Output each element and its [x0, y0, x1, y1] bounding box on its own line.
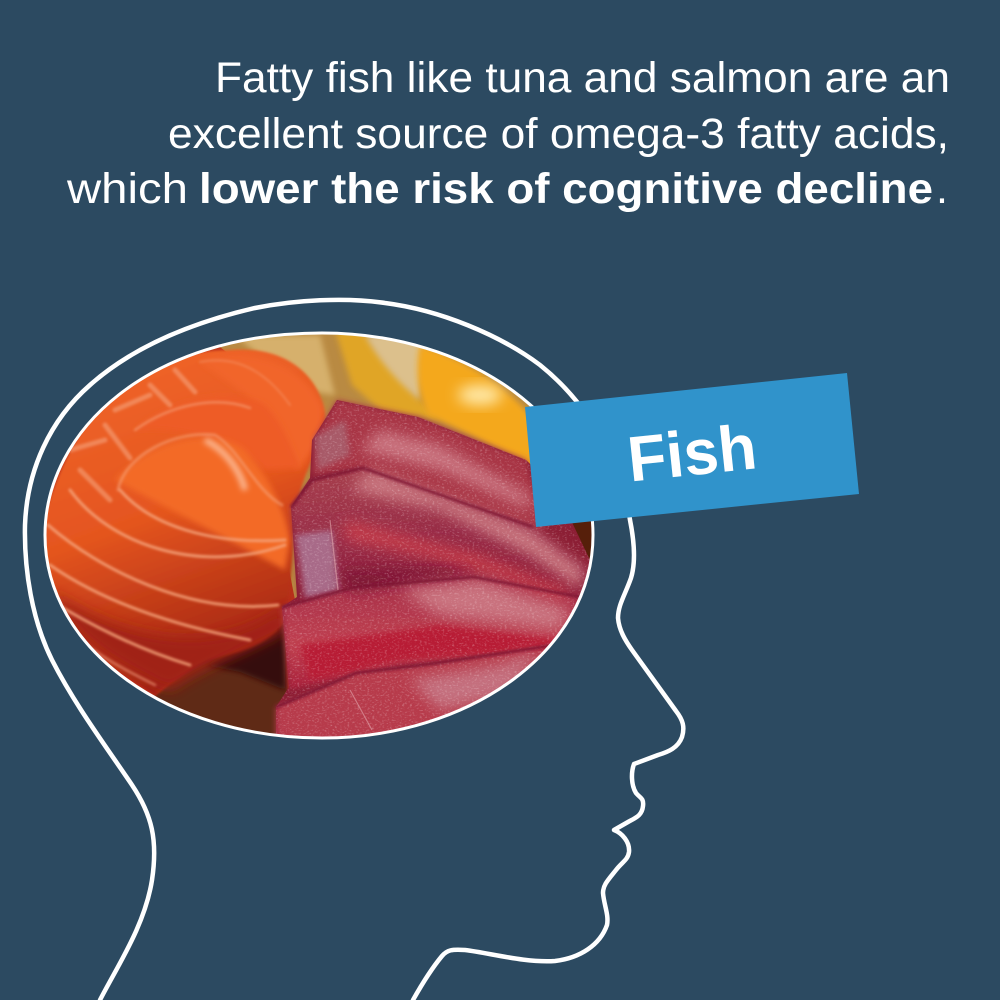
tuna surface speckle: [276, 400, 596, 740]
headline text: [66, 54, 950, 213]
salmon fat lines: [48, 360, 290, 685]
label: Fish: [525, 373, 859, 527]
brain oval border: [45, 333, 593, 738]
head silhouette outline: [25, 300, 683, 1000]
photo backdrop: lemon and plate: [48, 334, 530, 734]
headline text: excellent source of omega-3 fatty acids,: [168, 110, 949, 158]
headline text: Fatty fish like tuna and salmon are an: [215, 54, 950, 102]
tuna slices: [276, 400, 600, 745]
headline text: lower the risk of cognitive decline: [199, 165, 933, 213]
salmon slices: [40, 349, 325, 695]
label: Fish: Fish: [624, 410, 760, 496]
headline text: .: [936, 165, 948, 213]
headline text: which: [66, 165, 188, 213]
dark gap at right of tuna: [572, 521, 592, 559]
photo: salmon and tuna in brain oval: [40, 328, 600, 745]
tuna shading bands: [360, 430, 530, 510]
tuna dark seams: [276, 468, 580, 707]
